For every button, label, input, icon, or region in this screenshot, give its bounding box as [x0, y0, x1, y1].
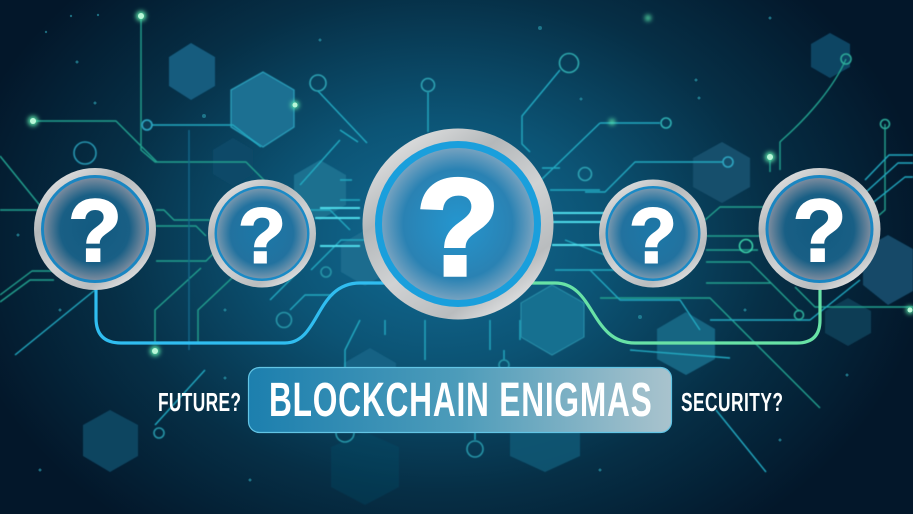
title text: BLOCKCHAIN ENIGMAS — [269, 372, 652, 427]
label: security: SECURITY? — [681, 388, 783, 417]
question circle 5 — [758, 168, 880, 290]
question circle 5: ? — [793, 181, 846, 280]
question circle 2 — [208, 180, 316, 288]
title banner — [248, 368, 672, 432]
connector: cyan curve left — [96, 283, 390, 343]
label: future: FUTURE? — [158, 388, 241, 417]
main connector: teal bus between question circles — [150, 233, 770, 237]
question circle 2: ? — [238, 192, 286, 280]
bright centre traces — [315, 208, 612, 246]
question circle 1: ? — [68, 181, 122, 280]
question circle 4 — [599, 180, 707, 288]
question circle 3: central: ? — [416, 151, 500, 305]
circuit nodes — [74, 54, 890, 457]
question circle 1 — [34, 168, 156, 290]
connector: green curve right — [525, 283, 820, 343]
question circle 4: ? — [629, 192, 677, 280]
question circle 3: central — [362, 128, 554, 320]
